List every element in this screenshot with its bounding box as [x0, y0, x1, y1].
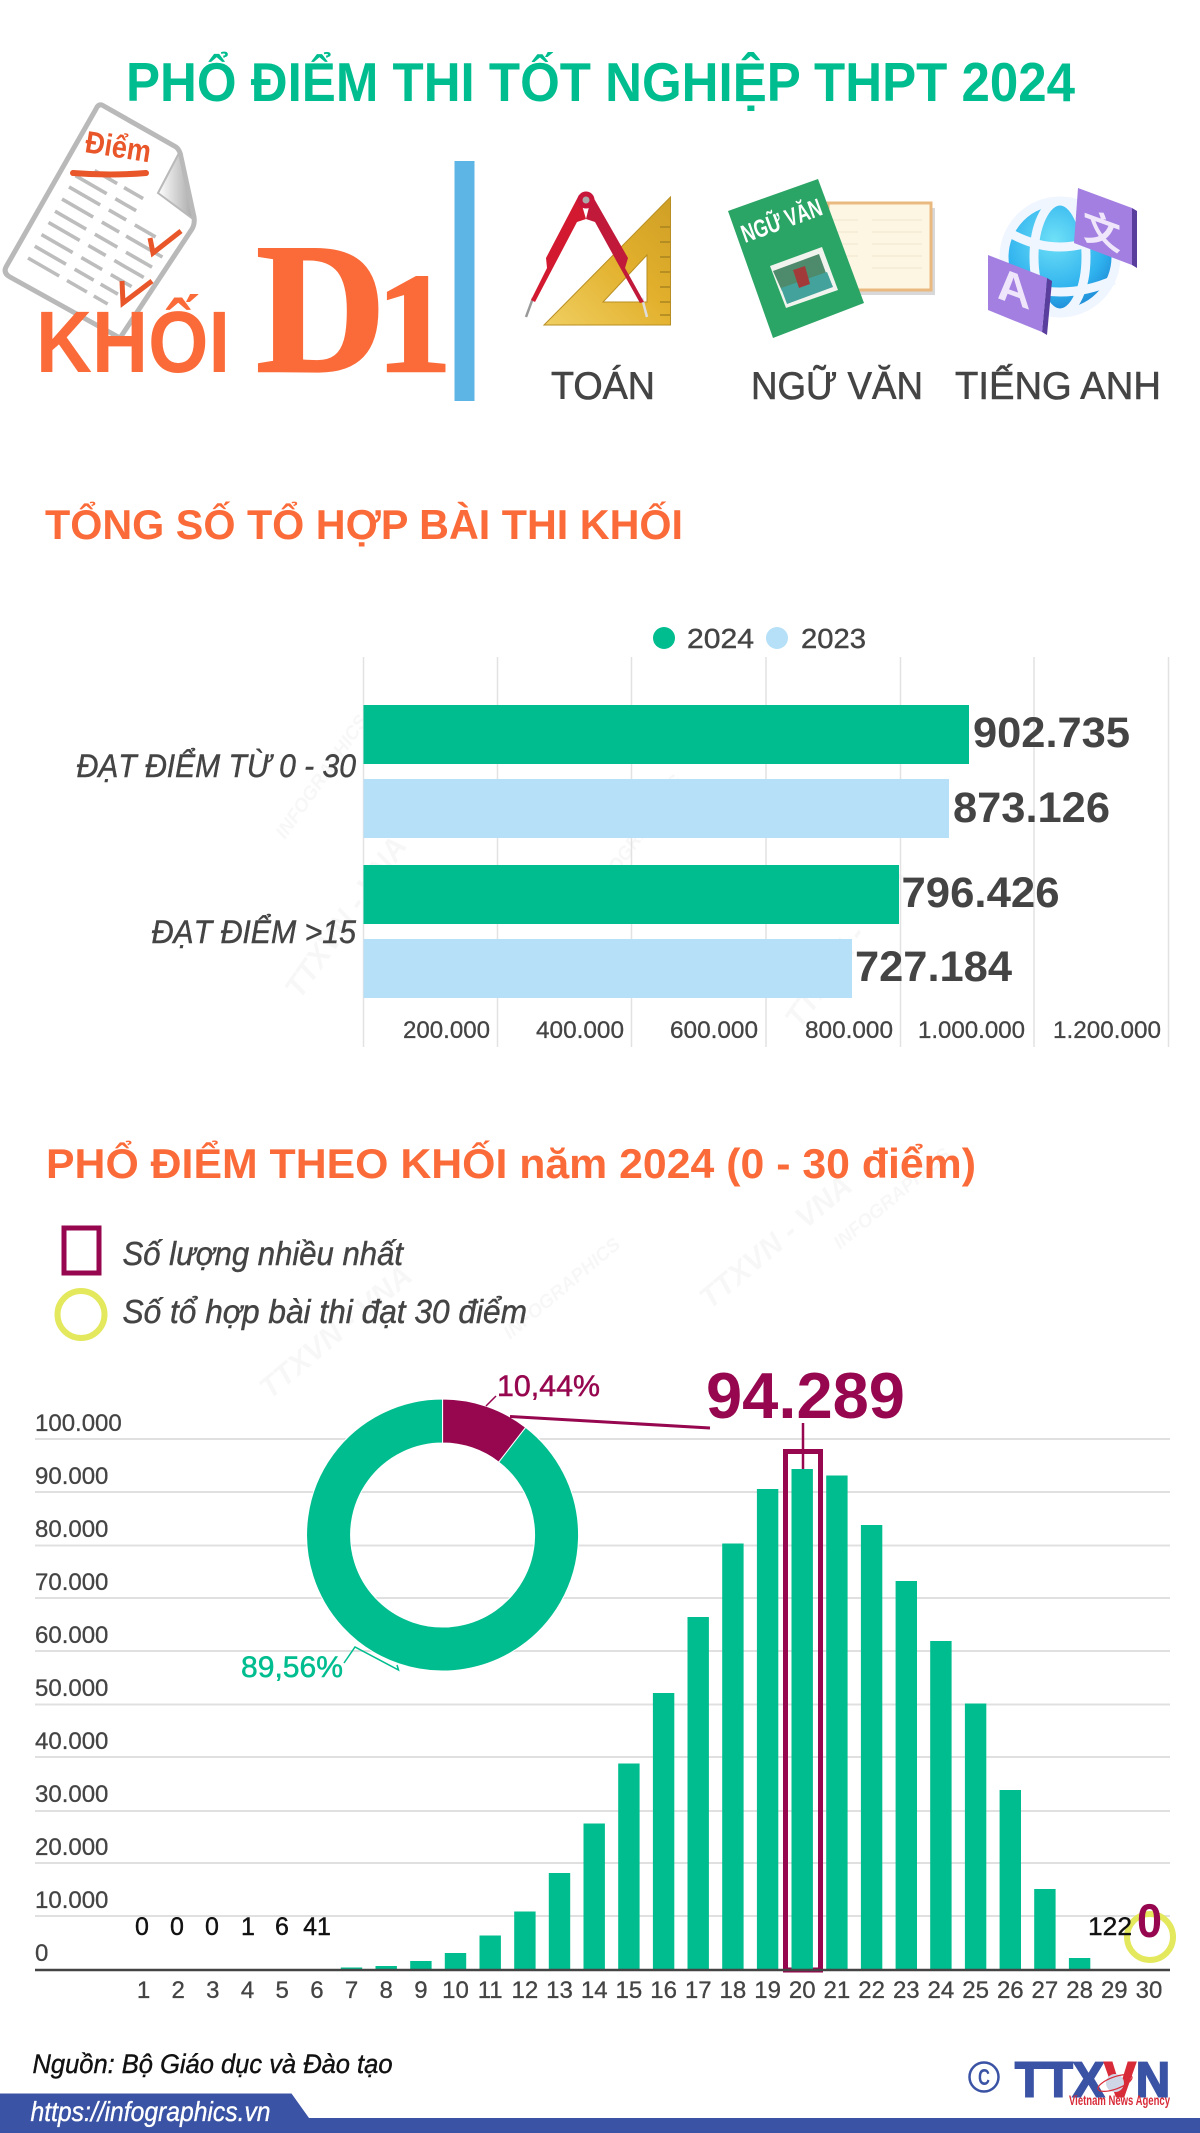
x axis labels: 12	[512, 1977, 538, 2004]
bar: 0-30 2024	[364, 705, 969, 764]
icon: exam paper: Điểm	[83, 124, 154, 169]
x axis labels	[137, 1977, 1162, 2004]
watermark: TTXVN - VNA	[779, 861, 914, 1034]
x axis labels: 3	[206, 1977, 219, 2004]
x axis labels: 6	[310, 1977, 324, 2004]
label: 89,56%	[241, 1647, 398, 1684]
panel: score distribution chart	[35, 1359, 1173, 2004]
x axis labels: 21	[824, 1977, 850, 2004]
data labels: low scores	[135, 1913, 331, 1941]
logo: TTXVN: C	[978, 2064, 990, 2090]
value: 873.126: 873.126	[953, 784, 1110, 832]
source: Nguồn: Bộ Giáo dục và Đào tạo	[32, 2049, 392, 2079]
y axis labels: 50.000	[35, 1675, 108, 1702]
x axis labels: 4	[241, 1977, 254, 2004]
y axis labels	[35, 1410, 122, 1967]
icon: translation globe	[988, 188, 1137, 335]
divider bar	[454, 161, 474, 401]
footer url: https://infographics.vn	[30, 2096, 270, 2127]
watermark: INFOGRAPHICS	[830, 1144, 955, 1254]
x axis labels: 1.000.000	[918, 1017, 1025, 1044]
x axis labels: 19	[754, 1977, 781, 2004]
x axis labels: 25	[962, 1977, 989, 2004]
heading: D1	[256, 206, 452, 412]
y axis labels: 100.000	[35, 1410, 122, 1437]
x axis labels: 11	[478, 1977, 503, 2004]
bar: >15 2023	[364, 939, 852, 998]
data labels: low scores: 0	[205, 1913, 219, 1941]
legend: 2023	[801, 623, 866, 654]
icon: literature book	[728, 179, 935, 338]
x axis labels: 30	[1136, 1977, 1162, 2004]
label: 89,56%: 89,56%	[241, 1651, 343, 1684]
x axis labels: 13	[546, 1977, 573, 2004]
label: 10,44%: 10,44%	[497, 1370, 600, 1403]
data labels: low scores: 0	[135, 1913, 149, 1941]
x axis labels: 24	[928, 1977, 954, 2004]
x axis labels: 9	[414, 1977, 428, 2004]
icon: translation globe: A	[997, 257, 1030, 321]
icon: exam paper	[5, 105, 194, 338]
x axis labels: 200.000	[403, 1017, 490, 1044]
x axis labels: 800.000	[805, 1017, 893, 1044]
x axis labels: 23	[893, 1977, 920, 2004]
highlight box: score 20	[786, 1452, 820, 1970]
y axis labels: 40.000	[35, 1728, 108, 1755]
watermark: INFOGRAPHICS	[500, 1234, 625, 1344]
x axis labels: 600.000	[670, 1017, 758, 1044]
data labels: low scores: 1	[241, 1913, 255, 1941]
x axis labels: 10	[442, 1977, 469, 2004]
callout: 30 points: 122	[1088, 1913, 1132, 1941]
y axis labels: 0	[35, 1940, 48, 1967]
callout: 94.289: 94.289	[706, 1359, 905, 1432]
x axis labels: 29	[1101, 1977, 1128, 2004]
watermark: TTXVN - VNA	[253, 1259, 419, 1405]
y axis labels: 10.000	[35, 1887, 108, 1914]
legend: 2024	[687, 623, 754, 654]
x axis labels: 7	[345, 1977, 358, 2004]
callout: 30 points	[1088, 1894, 1173, 1960]
x axis labels: 5	[276, 1977, 289, 2004]
x axis labels: 17	[685, 1977, 712, 2004]
label: ngữ văn: NGỮ VĂN	[751, 364, 923, 408]
x axis labels: 20	[789, 1977, 816, 2004]
legend: 30 points: Số tổ hợp bài thi đạt 30 điểm	[122, 1293, 527, 1330]
x axis labels: 15	[616, 1977, 642, 2004]
histogram bars	[341, 1469, 1090, 1970]
callout: 30 points: 0	[1137, 1894, 1162, 1947]
icon: compass and set square	[526, 192, 670, 325]
category label: >15: ĐẠT ĐIỂM >15	[152, 914, 356, 950]
watermark: INFOGRAPHICS	[272, 711, 373, 843]
value: 902.735: 902.735	[973, 709, 1130, 757]
value: 796.426: 796.426	[902, 869, 1060, 917]
y axis labels: 60.000	[35, 1622, 108, 1649]
legend: most frequent: Số lượng nhiều nhất	[122, 1235, 405, 1272]
x axis labels: 22	[858, 1977, 885, 2004]
footer bar	[0, 2094, 1200, 2133]
value: 727.184: 727.184	[855, 943, 1012, 991]
watermark: TTXVN - VNA	[279, 831, 414, 1004]
x axis labels: 14	[581, 1977, 608, 2004]
panel: horizontal bar chart	[76, 623, 1168, 1047]
watermark	[253, 711, 955, 1405]
watermark: TTXVN - VNA	[693, 1169, 859, 1315]
donut chart	[241, 1370, 600, 1684]
subject: toán	[526, 192, 670, 408]
heading: tổng số tổ hợp: TỔNG SỐ TỔ HỢP BÀI THI KHỐI	[45, 499, 683, 548]
x axis labels: 16	[650, 1977, 677, 2004]
label: toán: TOÁN	[551, 365, 655, 408]
subject: ngữ văn	[728, 179, 935, 408]
icon: literature book: NGỮ VĂN	[737, 192, 826, 249]
data labels: low scores: 6	[275, 1913, 289, 1941]
y axis labels: 30.000	[35, 1781, 108, 1808]
y axis labels: 80.000	[35, 1516, 108, 1543]
bar: >15 2024	[364, 865, 899, 924]
x axis labels: 18	[720, 1977, 746, 2004]
x axis labels: 27	[1032, 1977, 1058, 2004]
x axis labels: 28	[1066, 1977, 1093, 2004]
x axis labels: 1.200.000	[1053, 1017, 1161, 1044]
y axis labels: 90.000	[35, 1463, 108, 1490]
icon: translation globe: 文	[1083, 204, 1121, 261]
x axis labels: 8	[380, 1977, 393, 2004]
legend: score chart	[58, 1228, 527, 1338]
watermark: INFOGRAPHICS	[587, 771, 688, 903]
bar: 0-30 2023	[364, 779, 949, 838]
callout: 94.289	[510, 1359, 905, 1469]
legend	[653, 623, 866, 654]
legend: 30 points	[58, 1291, 527, 1338]
x axis labels: 1	[137, 1977, 150, 2004]
category label: 0-30: ĐẠT ĐIỂM TỪ 0 - 30	[76, 748, 356, 784]
title: PHỔ ĐIỂM THI TỐT NGHIỆP THPT 2024	[126, 51, 1075, 113]
x axis labels: 26	[997, 1977, 1024, 2004]
heading: khối: KHỐI	[36, 294, 230, 391]
x axis labels: 2	[172, 1977, 185, 2004]
heading: phổ điểm theo khối: PHỔ ĐIỂM THEO KHỐI năm 2024 (0 - 30 điểm)	[46, 1138, 976, 1187]
data labels: low scores: 0	[170, 1913, 184, 1941]
label: tiếng anh: TIẾNG ANH	[955, 364, 1161, 408]
legend: most frequent	[64, 1228, 405, 1273]
y axis labels: 70.000	[35, 1569, 108, 1596]
data labels: low scores: 41	[303, 1913, 331, 1941]
x axis labels: 400.000	[536, 1017, 624, 1044]
x axis labels	[403, 1017, 1161, 1044]
subject: tiếng anh	[955, 188, 1161, 408]
logo: TTXVN: TTXVN	[1015, 2054, 1170, 2108]
heading: D1: 1	[376, 244, 452, 402]
heading: D1: D	[256, 206, 386, 412]
y axis labels: 20.000	[35, 1834, 108, 1861]
